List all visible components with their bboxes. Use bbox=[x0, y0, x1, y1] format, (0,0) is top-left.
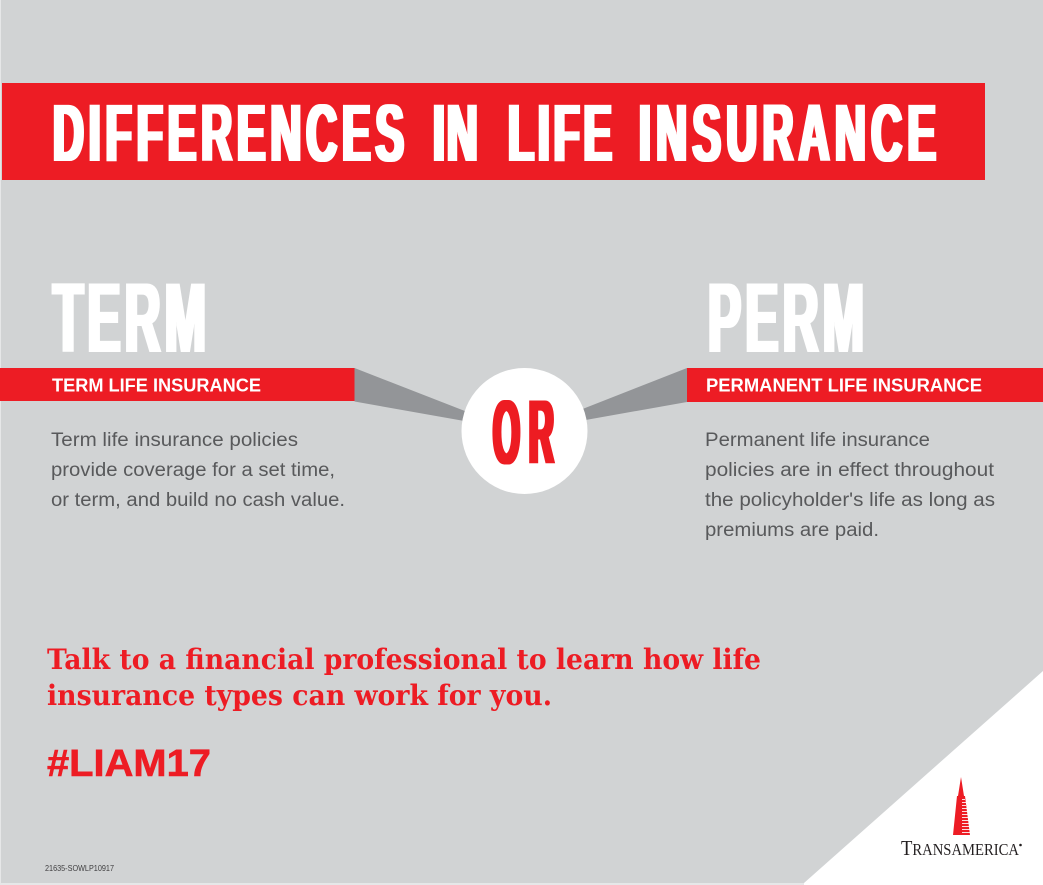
transamerica wordmark: TRANSAMERICA bbox=[901, 836, 1019, 860]
registered mark bbox=[1019, 844, 1022, 846]
perm ribbon bbox=[687, 368, 1043, 402]
perm description: the policyholder's life as long as bbox=[705, 490, 995, 511]
term description: provide coverage for a set time, bbox=[51, 460, 335, 481]
perm description: Permanent life insurance bbox=[705, 430, 930, 451]
title banner: IN bbox=[433, 87, 478, 179]
perm description bbox=[705, 430, 995, 541]
title banner: INSURANCE bbox=[639, 87, 936, 179]
call to action: insurance types can work for you. bbox=[47, 679, 552, 712]
title banner: LIFE bbox=[508, 87, 612, 179]
call to action: Talk to a financial professional to learn how life bbox=[47, 643, 761, 676]
title banner bbox=[2, 83, 985, 180]
right connector wedge bbox=[580, 368, 687, 421]
term heading: TERM bbox=[53, 262, 206, 374]
perm description: premiums are paid. bbox=[705, 520, 879, 541]
job code: 21635-SOWLP10917 bbox=[45, 864, 114, 873]
or badge: OR bbox=[493, 382, 554, 483]
perm heading: PERM bbox=[708, 262, 864, 374]
hashtag: #LIAM17 bbox=[47, 743, 211, 785]
title banner: DIFFERENCES bbox=[53, 87, 404, 179]
panel: perm bbox=[687, 262, 1043, 541]
corner white triangle bbox=[804, 671, 1043, 885]
term ribbon bbox=[0, 368, 354, 401]
perm description: policies are in effect throughout bbox=[705, 460, 995, 481]
term ribbon: TERM LIFE INSURANCE bbox=[52, 374, 261, 396]
panel: term bbox=[0, 262, 354, 511]
term description bbox=[51, 430, 345, 511]
perm ribbon: PERMANENT LIFE INSURANCE bbox=[706, 374, 982, 396]
term description: or term, and build no cash value. bbox=[51, 490, 345, 511]
term description: Term life insurance policies bbox=[51, 430, 298, 451]
call to action bbox=[47, 643, 761, 712]
left connector wedge bbox=[354, 368, 470, 422]
icon: transamerica pyramid logo bbox=[953, 777, 971, 835]
or badge bbox=[462, 368, 588, 494]
